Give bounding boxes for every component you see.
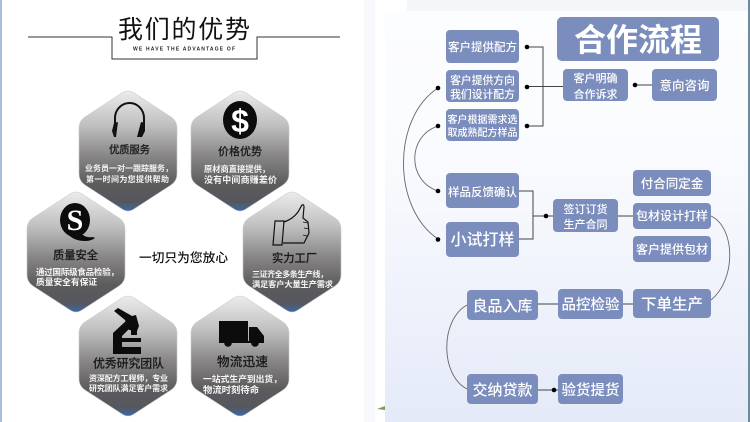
leaf fragment <box>377 406 385 410</box>
panel: 实力工厂: 三证齐全多条生产线， <box>252 269 328 279</box>
step: 签订订货生产合同: 签订订货 <box>564 202 608 216</box>
step: 交纳贷款: 交纳贷款 <box>472 381 533 399</box>
step: 良品入库 <box>467 290 538 320</box>
step: 客户根据需求: 客户根据需求选 <box>448 113 518 126</box>
panel: 优质服务 <box>79 91 177 211</box>
title: 合作流程 <box>557 17 719 61</box>
panel: 物流迅速 <box>191 296 289 416</box>
step: 验货提货: 验货提货 <box>562 381 620 399</box>
step: 交纳贷款 <box>467 374 538 404</box>
icon: QS mark: S <box>67 204 83 237</box>
step: 客户根据需求 <box>446 109 519 141</box>
panel: 物流迅速: 一站式生产到出货， <box>203 373 282 384</box>
step: 客户提供包材 <box>633 236 711 262</box>
icon: truck <box>219 321 264 347</box>
panel: 质量安全: 通过国际级食品检验， <box>36 267 119 277</box>
icon: thumbs up <box>273 205 309 245</box>
panel: 优质服务: 第一时间为您提供帮助 <box>86 174 169 184</box>
panel: 优质服务: 业务员一对一跟踪服务， <box>85 163 173 173</box>
header: 我们的优势: 我们的优势 <box>118 16 250 44</box>
step: 良品入库: 良品入库 <box>472 297 533 315</box>
panel: 优秀研究团队: 资深配方工程师，专业 <box>89 373 168 383</box>
panel: 实力工厂: 满足客户大量生产需求 <box>252 279 333 289</box>
step: 客户提供方向: 我们设计配方 <box>450 87 515 101</box>
step: 小试打样: 小试打样 <box>450 231 515 249</box>
step: 客户明确合作诉求: 合作诉求 <box>574 87 618 101</box>
flow connectors <box>404 45 730 392</box>
step: 意向咨询: 意向咨询 <box>659 78 710 93</box>
step: 品控检验 <box>558 289 623 319</box>
step: 客户提供方向 <box>446 70 519 102</box>
step: 样品反馈确认: 样品反馈确认 <box>448 185 517 199</box>
step: 客户根据需求: 取成熟配方样品 <box>448 126 518 139</box>
step: 小试打样 <box>446 222 519 257</box>
panel: 实力工厂: 实力工厂 <box>272 251 317 265</box>
step: 验货提货 <box>558 374 623 404</box>
step: 品控检验: 品控检验 <box>562 296 620 314</box>
icon: microscope <box>113 308 141 354</box>
step: 付合同定金 <box>633 170 711 196</box>
panel: 优秀研究团队: 优秀研究团队 <box>93 356 164 370</box>
step: 下单生产: 下单生产 <box>641 296 703 314</box>
panel: 质量安全: 质量安全有保证 <box>36 276 97 287</box>
panel: 实力工厂 <box>243 192 341 312</box>
header: 我们的优势 <box>28 16 340 59</box>
panel: 价格优势: 没有中间商赚差价 <box>204 174 277 185</box>
icon: headphones <box>112 103 145 137</box>
step: 客户提供配方 <box>446 30 519 63</box>
panel: 优秀研究团队: 研究团队满足客户需求 <box>89 383 168 393</box>
step: 包材设计打样 <box>633 203 711 229</box>
step: 付合同定金: 付合同定金 <box>641 176 704 191</box>
step: 客户提供包材: 客户提供包材 <box>636 242 708 256</box>
panel: 物流迅速: 物流时刻待命 <box>203 384 260 395</box>
step: 客户提供配方: 客户提供配方 <box>448 40 517 54</box>
center statement: 一切只为您放心 <box>139 250 228 265</box>
title: 合作流程: 合作流程 <box>574 22 702 58</box>
step: 意向咨询 <box>652 69 717 101</box>
icon: dollar: $ <box>231 103 249 139</box>
step: 客户明确合作诉求: 客户明确 <box>574 71 618 85</box>
step: 下单生产 <box>633 289 711 318</box>
panel: 优秀研究团队 <box>79 296 177 416</box>
panel: 优质服务: 优质服务 <box>109 143 150 156</box>
step: 客户明确合作诉求 <box>563 69 628 101</box>
panel: 价格优势 <box>191 91 289 211</box>
panel: 物流迅速: 物流迅速 <box>217 354 268 369</box>
step: 客户提供方向: 客户提供方向 <box>450 73 515 87</box>
step: 签订订货生产合同 <box>553 199 618 232</box>
step: 包材设计打样: 包材设计打样 <box>636 208 708 223</box>
header: 我们的优势: WE HAVE THE ADVANTAGE OF <box>133 46 235 52</box>
panel: 价格优势: 价格优势 <box>218 144 262 158</box>
panel: 质量安全: 质量安全 <box>53 248 99 262</box>
step: 签订订货生产合同: 生产合同 <box>564 217 608 231</box>
panel: 质量安全 <box>27 192 125 312</box>
step: 样品反馈确认 <box>446 173 519 208</box>
panel: 价格优势: 原材商直接提供， <box>204 164 270 174</box>
